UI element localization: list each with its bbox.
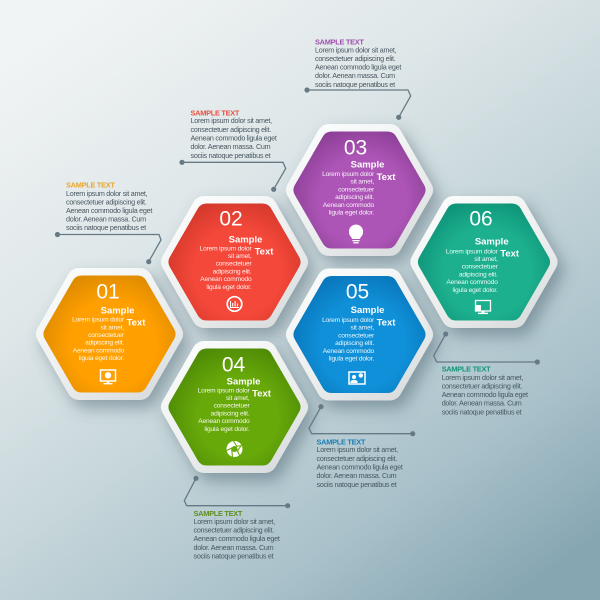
hexagon body text: sit amet, xyxy=(351,325,374,332)
hexagon title: Text xyxy=(377,172,396,183)
hexagon body text: Aenean commodo xyxy=(73,347,124,354)
hexagon body text: Aenean commodo xyxy=(198,418,250,425)
number 04: 04 xyxy=(222,354,245,376)
hexagon body text: ligula eget dolor. xyxy=(79,355,124,362)
hexagon body text: Lorem ipsum dolor xyxy=(322,317,375,324)
callout: 01 xyxy=(55,181,161,264)
callout text: sociis natoque penatibus et xyxy=(315,80,395,89)
hexagon body text: adipiscing elit. xyxy=(213,268,252,275)
callout text: consectetuer adipiscing elit. xyxy=(315,54,396,63)
hexagon body text: Aenean commodo xyxy=(323,202,374,209)
hexagon body text: consectetuer xyxy=(214,403,250,410)
callout text: Aenean commodo ligula eget xyxy=(190,133,277,142)
hexagon title: Sample xyxy=(351,159,384,170)
hexagon body text: Lorem ipsum dolor xyxy=(322,171,375,178)
hexagon body text: Aenean commodo xyxy=(200,276,252,283)
panel: hexagon 03 xyxy=(298,136,421,244)
hexagon body text: ligula eget dolor. xyxy=(204,426,250,433)
hexagon body text: adipiscing elit. xyxy=(335,194,374,201)
icon: desktop monitor xyxy=(476,300,490,314)
hexagon body text: sit amet, xyxy=(101,324,124,331)
hexagon body text: ligula eget dolor. xyxy=(206,284,252,291)
hexagon body text: sit amet, xyxy=(474,256,498,263)
callout text: Lorem ipsum dolor sit amet, xyxy=(442,373,523,382)
callout text: consectetuer adipiscing elit. xyxy=(190,125,271,134)
hexagon title: Text xyxy=(127,317,146,328)
panel: hexagon 04 xyxy=(173,353,296,461)
hexagon title: Sample xyxy=(351,305,384,316)
callout text: consectetuer adipiscing elit. xyxy=(316,454,397,463)
icon: round chart badge xyxy=(227,297,242,311)
hexagon body text: ligula eget dolor. xyxy=(329,210,374,216)
hexagon body text: adipiscing elit. xyxy=(459,271,498,278)
icon: monitor with chart xyxy=(100,370,116,384)
hexagon body text: consectetuer xyxy=(338,186,375,193)
callout text: sociis natoque penatibus et xyxy=(190,151,271,160)
hexagon body text: adipiscing elit. xyxy=(211,410,250,417)
hexagon title: Text xyxy=(255,246,274,257)
callout text: Lorem ipsum dolor sit amet, xyxy=(190,116,272,125)
callout text: dolor. Aenean massa. Cum xyxy=(66,215,146,224)
callout text: Aenean commodo ligula eget xyxy=(442,390,528,399)
callout heading: SAMPLE TEXT xyxy=(442,365,491,374)
callout text: consectetuer adipiscing elit. xyxy=(442,382,522,390)
icon: presentation frame xyxy=(349,372,365,384)
callout text: sociis natoque penatibus et xyxy=(442,408,522,416)
callout heading: SAMPLE TEXT xyxy=(190,108,240,117)
callout text: Lorem ipsum dolor sit amet, xyxy=(316,445,398,454)
hexagon body text: sit amet, xyxy=(351,179,374,186)
callout text: consectetuer adipiscing elit. xyxy=(66,197,147,206)
callout text: dolor. Aenean massa. Cum xyxy=(315,71,395,80)
hexagon title: Text xyxy=(500,248,520,259)
panel: hexagon 06 xyxy=(422,208,546,316)
callout text: Lorem ipsum dolor sit amet, xyxy=(315,46,397,54)
callout: 06 xyxy=(434,331,540,416)
hexagon body text: Aenean commodo xyxy=(323,348,374,355)
hexagon body text: ligula eget dolor. xyxy=(329,356,374,362)
hexagon title: Text xyxy=(377,317,396,328)
hexagon title: Sample xyxy=(229,234,262,245)
panel: hexagon 05 xyxy=(298,280,421,388)
hexagon body text: consectetuer xyxy=(462,264,499,271)
hexagon title: Text xyxy=(252,388,272,399)
hexagon body text: sit amet, xyxy=(226,395,250,402)
hexagon body text: Lorem ipsum dolor xyxy=(198,387,250,394)
callout text: Aenean commodo ligula eget xyxy=(316,462,403,472)
hexagon body text: Lorem ipsum dolor xyxy=(72,317,125,324)
icon: light bulb xyxy=(349,224,363,243)
callout text: Aenean commodo ligula eget xyxy=(315,62,401,71)
callout heading: SAMPLE TEXT xyxy=(316,437,366,446)
number 02: 02 xyxy=(219,208,243,230)
callout text: dolor. Aenean massa. Cum xyxy=(316,471,397,480)
callout text: dolor. Aenean massa. Cum xyxy=(190,142,271,151)
panel: hexagon 01 xyxy=(48,280,171,388)
hexagon body text: consectetuer xyxy=(88,332,125,339)
callout text: Lorem ipsum dolor sit amet, xyxy=(194,517,275,526)
number 01: 01 xyxy=(96,280,120,304)
callout text: dolor. Aenean massa. Cum xyxy=(442,398,522,408)
number 05: 05 xyxy=(346,280,369,304)
callout: 03 xyxy=(304,37,411,120)
callout text: sociis natoque penatibus et xyxy=(316,480,397,489)
number 06: 06 xyxy=(469,208,493,230)
callout text: Lorem ipsum dolor sit amet, xyxy=(66,189,148,198)
hexagon body text: ligula eget dolor. xyxy=(453,287,498,294)
panel: hexagon 02 xyxy=(173,208,296,316)
callout heading: SAMPLE TEXT xyxy=(66,181,115,190)
callout: 05 xyxy=(309,404,415,489)
hexagon title: Sample xyxy=(227,376,260,387)
number 03: 03 xyxy=(344,136,367,160)
callout text: Aenean commodo ligula eget xyxy=(66,206,152,215)
hexagon body text: adipiscing elit. xyxy=(335,340,374,347)
hexagon body text: Aenean commodo xyxy=(446,279,498,286)
hexagon body text: sit amet, xyxy=(228,253,252,260)
callout text: sociis natoque penatibus et xyxy=(66,223,146,232)
hexagon body text: consectetuer xyxy=(338,332,375,339)
callout heading: SAMPLE TEXT xyxy=(194,509,243,518)
hexagon title: Sample xyxy=(101,305,134,316)
callout: 02 xyxy=(179,108,286,192)
hexagon body text: adipiscing elit. xyxy=(85,340,124,347)
callout text: sociis natoque penatibus et xyxy=(194,552,274,560)
callout text: Aenean commodo ligula eget xyxy=(194,534,280,543)
callout text: consectetuer adipiscing elit. xyxy=(194,526,274,535)
icon: camera aperture xyxy=(226,441,242,457)
callout: 04 xyxy=(184,476,290,560)
hexagon body text: Lorem ipsum dolor xyxy=(446,248,499,255)
callout text: dolor. Aenean massa. Cum xyxy=(194,543,274,552)
hexagon body text: Lorem ipsum dolor xyxy=(200,245,252,252)
hexagon body text: consectetuer xyxy=(216,261,252,268)
callout heading: SAMPLE TEXT xyxy=(315,37,364,46)
hexagon title: Sample xyxy=(475,236,509,247)
